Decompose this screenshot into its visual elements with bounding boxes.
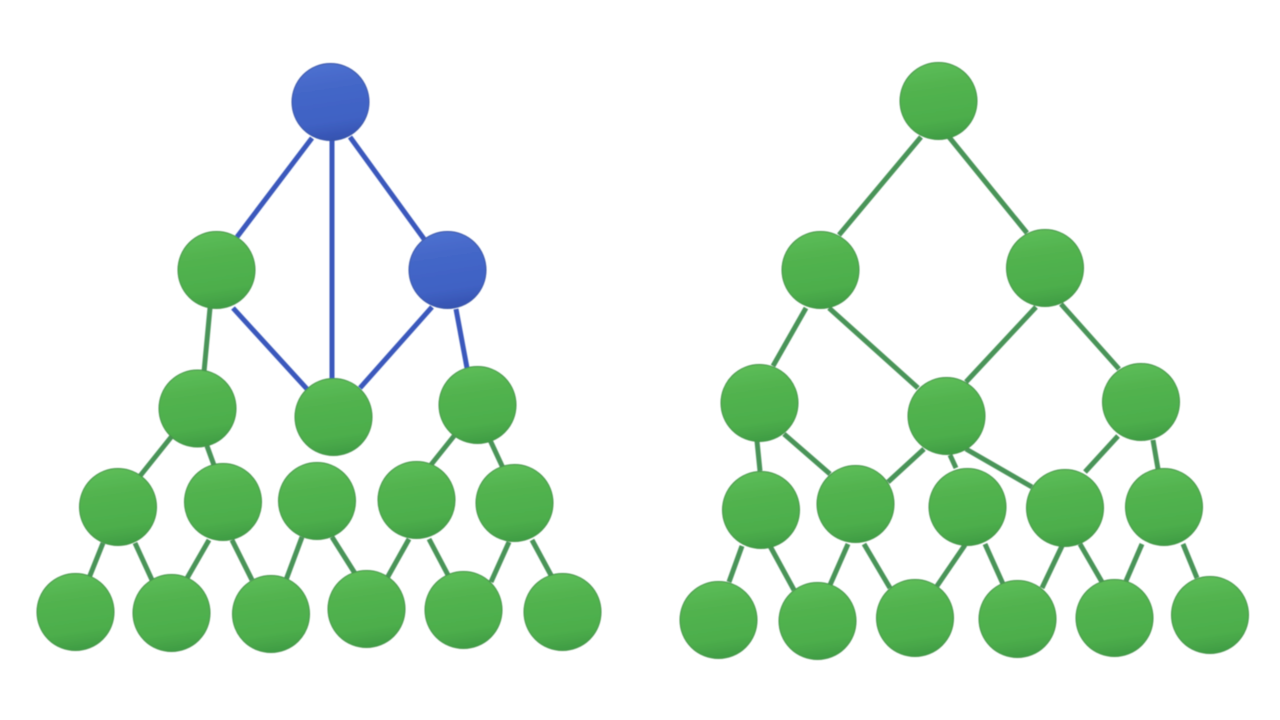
left tree: green links xyxy=(89,308,552,582)
left tree xyxy=(37,64,601,652)
left tree: blue links xyxy=(233,137,467,389)
right tree: links xyxy=(729,137,1197,590)
right tree xyxy=(680,62,1248,660)
right tree: green nodes xyxy=(680,62,1248,660)
left tree: green nodes xyxy=(37,232,601,652)
left tree: blue nodes xyxy=(292,64,486,308)
